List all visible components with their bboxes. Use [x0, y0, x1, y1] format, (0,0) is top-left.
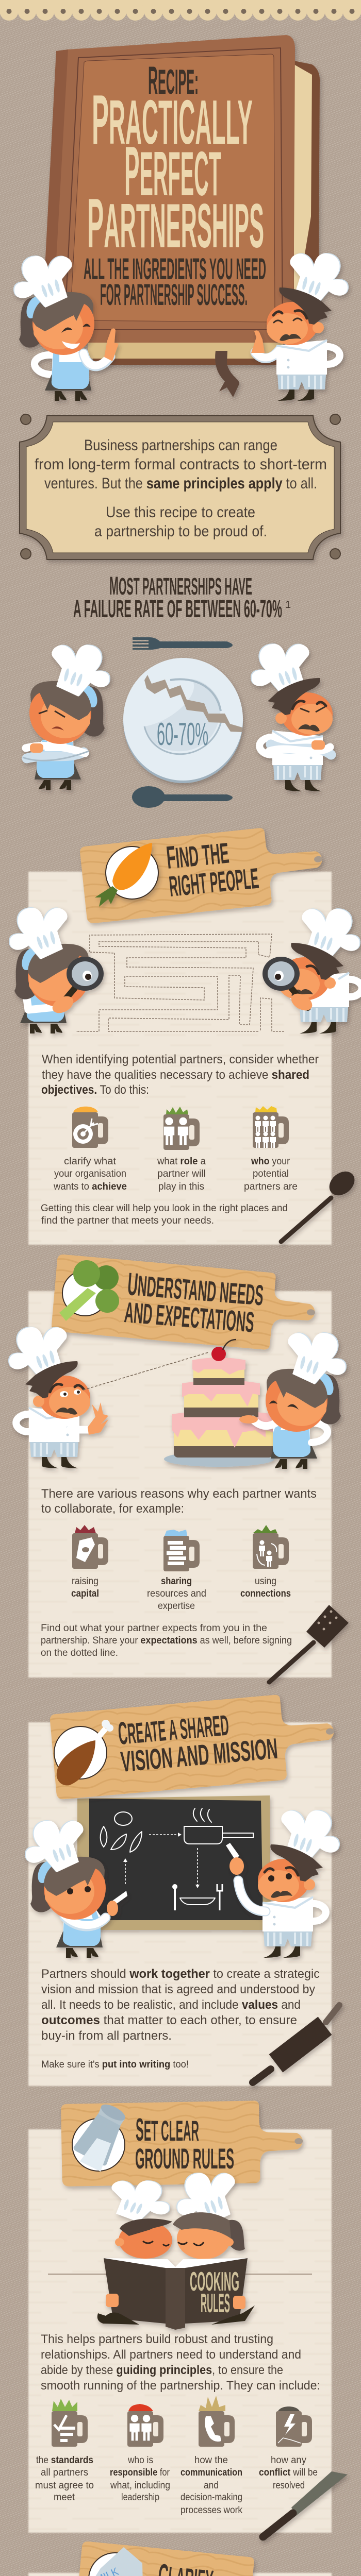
mug icon: responsibility: [127, 2404, 163, 2447]
captions: on the dotted line.: [41, 1648, 118, 1658]
failure rate heading: [73, 571, 291, 623]
captions: communication: [180, 2467, 242, 2478]
text: ground rules: abide by these guiding principles, to ensure the: [41, 2363, 283, 2377]
captions: all partners: [41, 2467, 88, 2478]
icon: slotted spatula: [269, 1605, 349, 1682]
captions: leadership: [121, 2492, 159, 2503]
text: shared vision: vision and mission that is agreed and understood by: [41, 1982, 315, 1996]
captions: partners are: [244, 1181, 298, 1192]
panel: intro card: [20, 416, 340, 560]
captions: resources and: [147, 1588, 206, 1599]
captions: how the: [194, 2455, 228, 2466]
captions: Getting this clear will help you look in the right places and: [41, 1203, 288, 1214]
captions: [41, 1576, 292, 1658]
icon: bread knife: [263, 2471, 348, 2537]
captions: how any: [271, 2455, 306, 2466]
captions: processes work: [180, 2505, 242, 2516]
captions: partner will: [157, 1168, 206, 1179]
captions: responsible for: [110, 2467, 170, 2478]
chopping board heading: [61, 2100, 304, 2187]
chopping board heading: [50, 1690, 338, 1800]
chef: woman with magnifying glass: [9, 907, 104, 1033]
panel: find the right people: FIND THE: [165, 835, 231, 876]
mug icon: standards checklist: [52, 2399, 88, 2447]
chef: hungry man: [8, 1327, 108, 1468]
icon: rolling pin: [253, 2005, 339, 2082]
captions: the standards: [36, 2455, 93, 2466]
maze: [76, 934, 285, 1031]
text: various reasons: [41, 1487, 317, 1516]
tiered cake: [164, 1340, 274, 1467]
captions: partnership. Share your expectations as well, before signing: [41, 1635, 292, 1646]
text: ground rules: [41, 2332, 320, 2393]
text: ground rules: smooth running of the partnership. They can include:: [41, 2379, 320, 2393]
captions: resolved: [273, 2480, 305, 2491]
chef: woman with cake: [239, 1332, 347, 1469]
text: identifying partners: they have the qualities necessary to achieve shared: [42, 1068, 309, 1082]
title: RECIPE:: [148, 59, 199, 103]
captions: your organisation: [54, 1168, 126, 1179]
mug icon: capital: [72, 1525, 108, 1569]
chef: woman presenting book: [13, 256, 119, 401]
recipe book cover: [41, 35, 320, 397]
chopping board heading: [75, 2541, 284, 2576]
panel: set clear ground rules: SET CLEAR: [136, 2112, 199, 2148]
text: identifying partners: When identifying potential partners, consider whether: [42, 1053, 319, 1066]
panel: clarify roles: [28, 2541, 348, 2576]
captions: wants to achieve: [53, 1181, 127, 1192]
mug icon: conflict: [276, 2406, 312, 2447]
mug icon: group of people: [253, 1106, 289, 1148]
chef: unhappy woman: [23, 645, 110, 790]
chefs reading cooking rules book: [97, 2173, 255, 2330]
intro text: ventures. But the same principles apply to all.: [44, 475, 317, 492]
mug icon: communication: [199, 2396, 235, 2447]
broken plate chart: 60-70%: [123, 658, 243, 783]
mug icon: resources: [163, 1530, 200, 1571]
icon: wooden spoon: [281, 1166, 359, 1242]
panel: create a shared vision and mission: [25, 1690, 340, 2086]
plate with chicken leg: [54, 1720, 113, 1785]
text: shared vision: Make sure it's put into writing too!: [41, 2059, 189, 2070]
text: various reasons: There are various reasons why each partner wants: [41, 1487, 317, 1501]
text: shared vision: Partners should work together to create a strategic: [41, 1967, 320, 1981]
mug icon: partners: [163, 1107, 200, 1150]
panel: find the right people: [9, 822, 361, 1245]
text: shared vision: buy-in from all partners.: [41, 2029, 172, 2043]
mug icon: connections: [253, 1525, 289, 1569]
paper background: [28, 872, 332, 1245]
captions: conflict will be: [259, 2467, 318, 2478]
chefs reading cooking rules book: COOKING: [190, 2267, 239, 2297]
text: identifying partners: [41, 1053, 319, 1097]
captions: what, including: [110, 2480, 170, 2491]
captions: [35, 2455, 318, 2516]
dashed gaze line: [83, 1352, 208, 1390]
text: shared vision: all. It needs to be realistic, and include values and: [41, 1998, 301, 2012]
paper background: [28, 2573, 332, 2576]
top scalloped border: [0, 0, 361, 21]
captions: using: [255, 1576, 276, 1587]
plate with milk carton: [83, 2547, 143, 2576]
intro text: from long-term formal contracts to short-term: [35, 456, 327, 473]
captions: meet: [54, 2492, 75, 2503]
card corner dots: [21, 414, 340, 559]
intro text: a partnership to be proud of.: [94, 523, 267, 540]
captions: play in this: [158, 1181, 204, 1192]
chefs reading cooking rules book: RULES: [201, 2289, 230, 2318]
bookmark ribbon: [215, 351, 239, 397]
mug icon: target: [72, 1107, 108, 1148]
plate with salt shaker: [72, 2099, 132, 2172]
captions: and: [204, 2480, 219, 2491]
plate with broccoli: [59, 1260, 119, 1321]
intro text: [35, 437, 327, 540]
captions: must agree to: [35, 2480, 94, 2491]
text: various reasons: to collaborate, for example:: [41, 1502, 184, 1516]
captions: capital: [71, 1588, 99, 1599]
captions: [41, 1156, 298, 1226]
captions: what role a: [157, 1156, 206, 1167]
failure rate heading: 1: [285, 599, 291, 611]
captions: find the partner that meets your needs.: [41, 1215, 214, 1226]
captions: Find out what your partner expects from you in the: [41, 1623, 267, 1634]
chalkboard: [77, 1795, 271, 1930]
captions: connections: [240, 1588, 291, 1599]
captions: who your: [251, 1156, 290, 1167]
captions: who is: [127, 2455, 153, 2466]
panel: understand needs and expectations: [8, 1254, 349, 1682]
text: ground rules: relationships. All partners need to understand and: [41, 2348, 301, 2362]
panel: set clear ground rules: [28, 2099, 348, 2537]
title: [84, 59, 266, 312]
chef: woman with chalk: [25, 1820, 127, 1958]
text: identifying partners: objectives. To do this:: [41, 1083, 149, 1097]
chef: man with chalk: [226, 1810, 340, 1958]
icon: spoon: [132, 786, 233, 808]
intro text: Business partnerships can range: [84, 437, 277, 454]
captions: raising: [72, 1576, 99, 1587]
chef: man presenting book: [251, 253, 349, 401]
captions: decision-making: [180, 2492, 242, 2503]
text: ground rules: This helps partners build robust and trusting: [41, 2332, 273, 2346]
chopping board heading: [79, 822, 326, 924]
divider line: [48, 2274, 312, 2275]
chef: man with magnifying glass: [262, 908, 361, 1033]
captions: potential: [253, 1168, 289, 1179]
text: shared vision: outcomes that matter to each other, to ensure: [41, 2013, 297, 2027]
paper background: [28, 1722, 332, 2086]
chef: unhappy man: [251, 643, 333, 791]
paper background: [28, 2129, 332, 2533]
paper background: [28, 1291, 332, 1677]
icon: fork: [133, 637, 233, 650]
intro text: Use this recipe to create: [106, 504, 255, 521]
captions: expertise: [158, 1601, 195, 1612]
broken plate chart: 60-70%: 60-70%: [157, 717, 208, 752]
captions: clarify what: [64, 1156, 117, 1167]
text: shared vision: [41, 1967, 320, 2070]
chopping board heading: [51, 1254, 318, 1354]
plate with carrot: [95, 843, 158, 907]
captions: sharing: [161, 1576, 192, 1587]
